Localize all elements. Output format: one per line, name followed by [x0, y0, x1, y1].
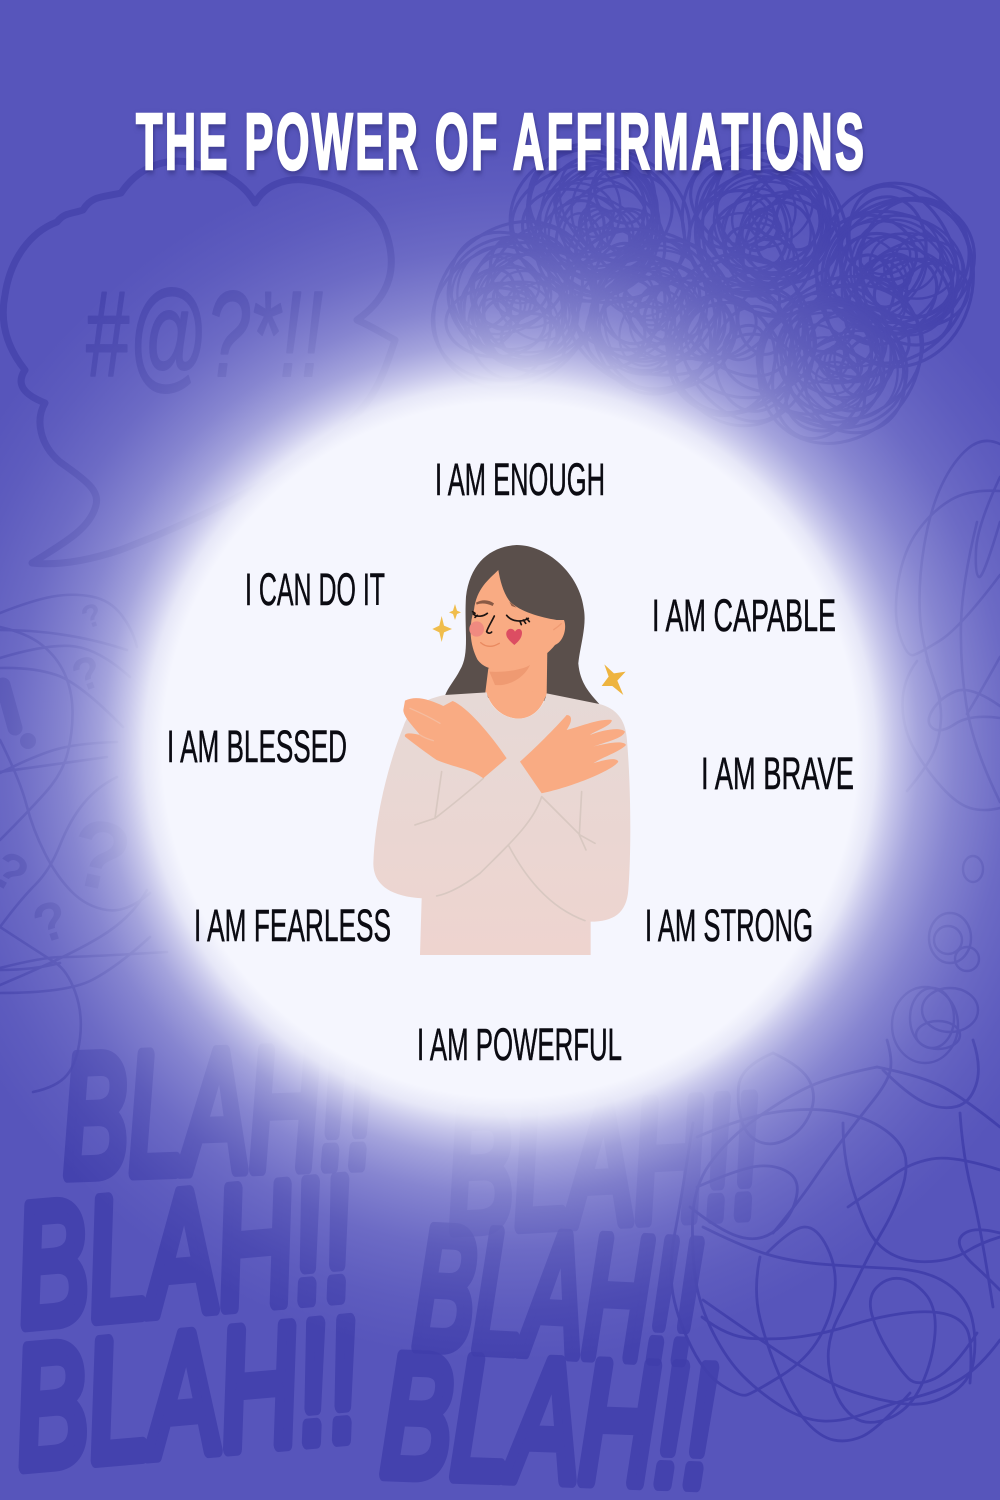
neck base	[486, 690, 547, 719]
label: enough: I AM ENOUGH	[435, 454, 605, 505]
sparkle large	[432, 616, 452, 642]
label: blessed: I AM BLESSED	[167, 721, 347, 772]
smile	[481, 643, 499, 646]
doodle: large scribble bottom right	[671, 1040, 1000, 1441]
hair	[445, 545, 599, 704]
sparkle right	[602, 664, 626, 695]
face	[471, 570, 565, 670]
left hand	[403, 698, 507, 778]
affirmation labels	[167, 454, 854, 1070]
doodle: scribble right	[896, 441, 1000, 810]
doodle: speech bubble with symbols: #@?*!!	[85, 266, 323, 402]
blah 3: BLAH!!	[6, 1283, 366, 1500]
title: THE POWER OF AFFIRMATIONS	[136, 97, 864, 186]
right hand	[520, 715, 626, 793]
doodle: scribble left with punctuation	[0, 595, 167, 1092]
label: can do it: I CAN DO IT	[245, 564, 385, 615]
label: brave: I AM BRAVE	[701, 748, 854, 799]
sweater folds	[415, 772, 595, 921]
doodle: scribble left with punctuation: ?	[65, 644, 109, 702]
label: fearless: I AM FEARLESS	[194, 900, 391, 951]
sparkle small	[449, 604, 461, 620]
doodle: dense scribbles top right	[370, 82, 1000, 498]
doodle: speech bubble with symbols	[3, 161, 395, 564]
blah 2: BLAH!!	[8, 1142, 360, 1363]
doodle: BLAH lettering	[6, 1010, 763, 1500]
doodle: scribble left with punctuation: ?	[76, 595, 107, 636]
neck shadow	[489, 665, 530, 685]
closed eyes	[473, 612, 529, 625]
doodle: small scribble loops right	[892, 856, 983, 1063]
ear detail	[553, 623, 562, 630]
nose	[487, 616, 494, 633]
label: powerful: I AM POWERFUL	[417, 1019, 622, 1070]
label: capable: I AM CAPABLE	[652, 590, 836, 641]
blah 6: BLAH!!	[442, 1060, 763, 1268]
blah 1: BLAH!!	[58, 1010, 377, 1213]
doodle: scribble left with punctuation: ?	[60, 797, 140, 914]
sweater	[373, 692, 630, 955]
brows	[476, 600, 517, 608]
doodle: scribble left with punctuation: ?	[26, 888, 76, 956]
label: strong: I AM STRONG	[645, 900, 813, 951]
blush	[469, 621, 484, 637]
heart cheek	[506, 629, 522, 645]
neck	[485, 650, 547, 697]
left hand finger gaps	[410, 708, 440, 741]
illustration: woman hugging herself	[373, 545, 630, 955]
blah 5: BLAH!!	[410, 1191, 704, 1398]
